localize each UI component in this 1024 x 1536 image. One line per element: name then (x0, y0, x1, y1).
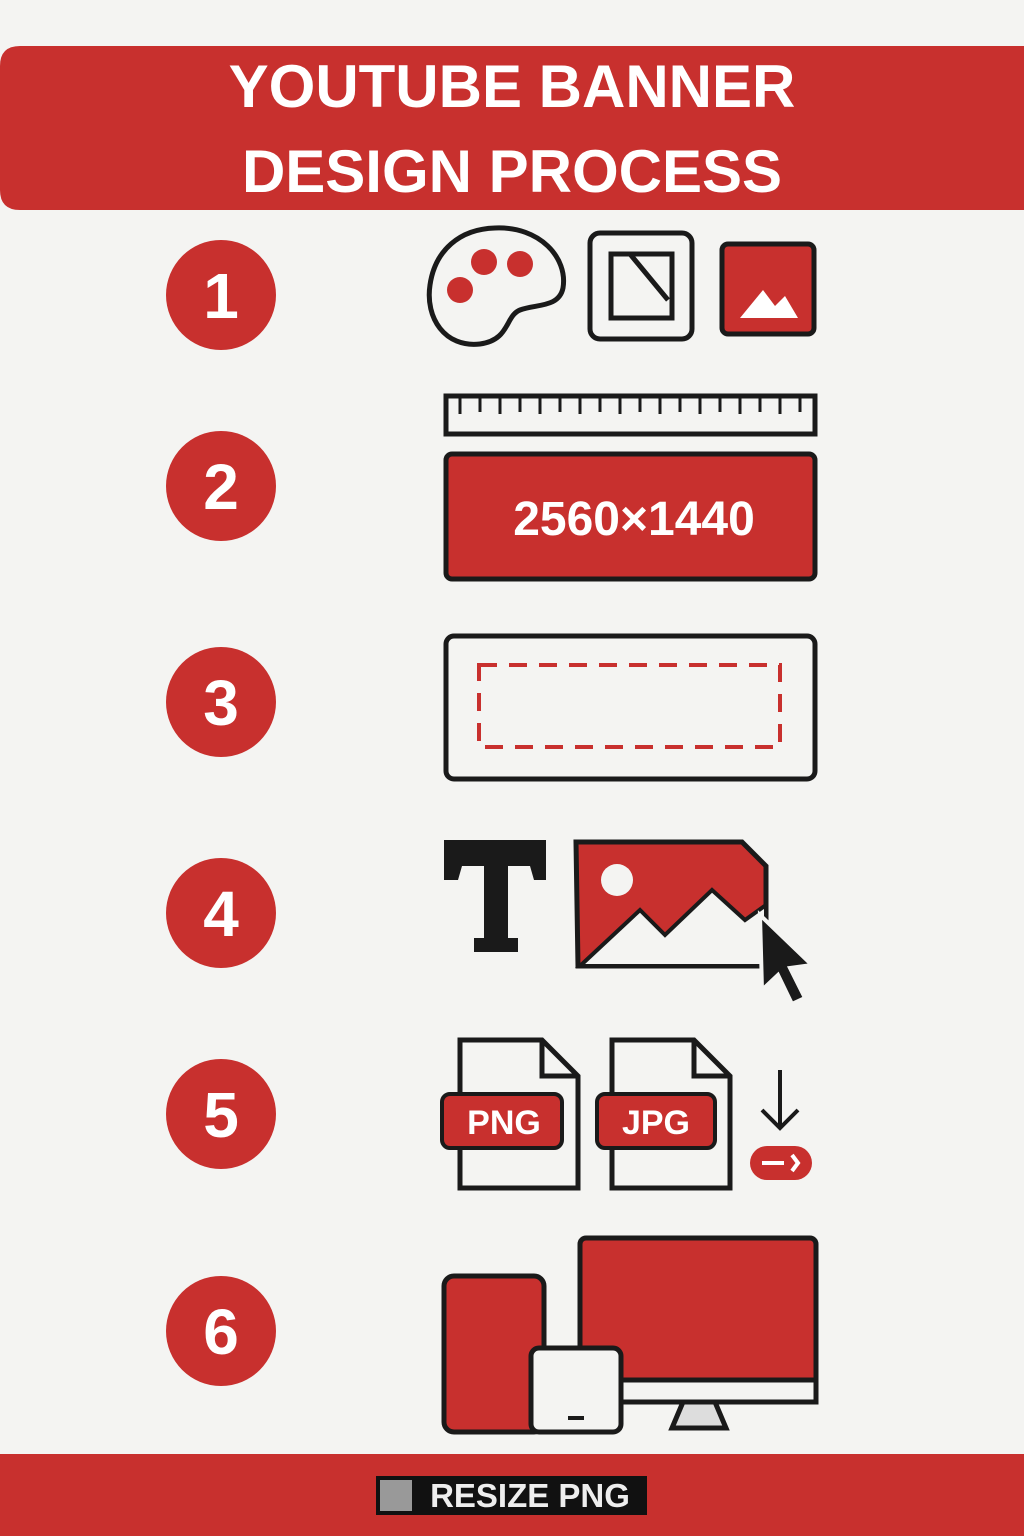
step number circles: 1 (203, 260, 239, 332)
title banner: DESIGN PROCESS (242, 138, 782, 205)
step 5: file formats and download: PNG (467, 1104, 541, 1142)
step number circles (166, 240, 276, 1386)
title banner: YOUTUBE BANNER (229, 53, 795, 120)
title banner (0, 46, 1024, 210)
step number circles: 6 (203, 1296, 239, 1368)
step number circles: 5 (203, 1079, 239, 1151)
step number circles: 3 (203, 667, 239, 739)
step 1 icons: palette, tool, image (429, 228, 814, 344)
step number circles: 2 (203, 451, 239, 523)
step 2: ruler and dimensions: 2560×1440 (513, 493, 755, 546)
step 2: ruler and dimensions (446, 396, 815, 579)
footer bar with logo (0, 1454, 1024, 1536)
step 3: safe area (446, 636, 815, 779)
step 5: file formats and download (442, 1040, 812, 1188)
step number circles: 4 (203, 878, 239, 950)
footer bar with logo: RESIZE PNG (430, 1477, 630, 1514)
step 6: devices (444, 1238, 816, 1432)
step 4: text and image (444, 840, 812, 1004)
step 5: file formats and download: JPG (622, 1104, 690, 1142)
